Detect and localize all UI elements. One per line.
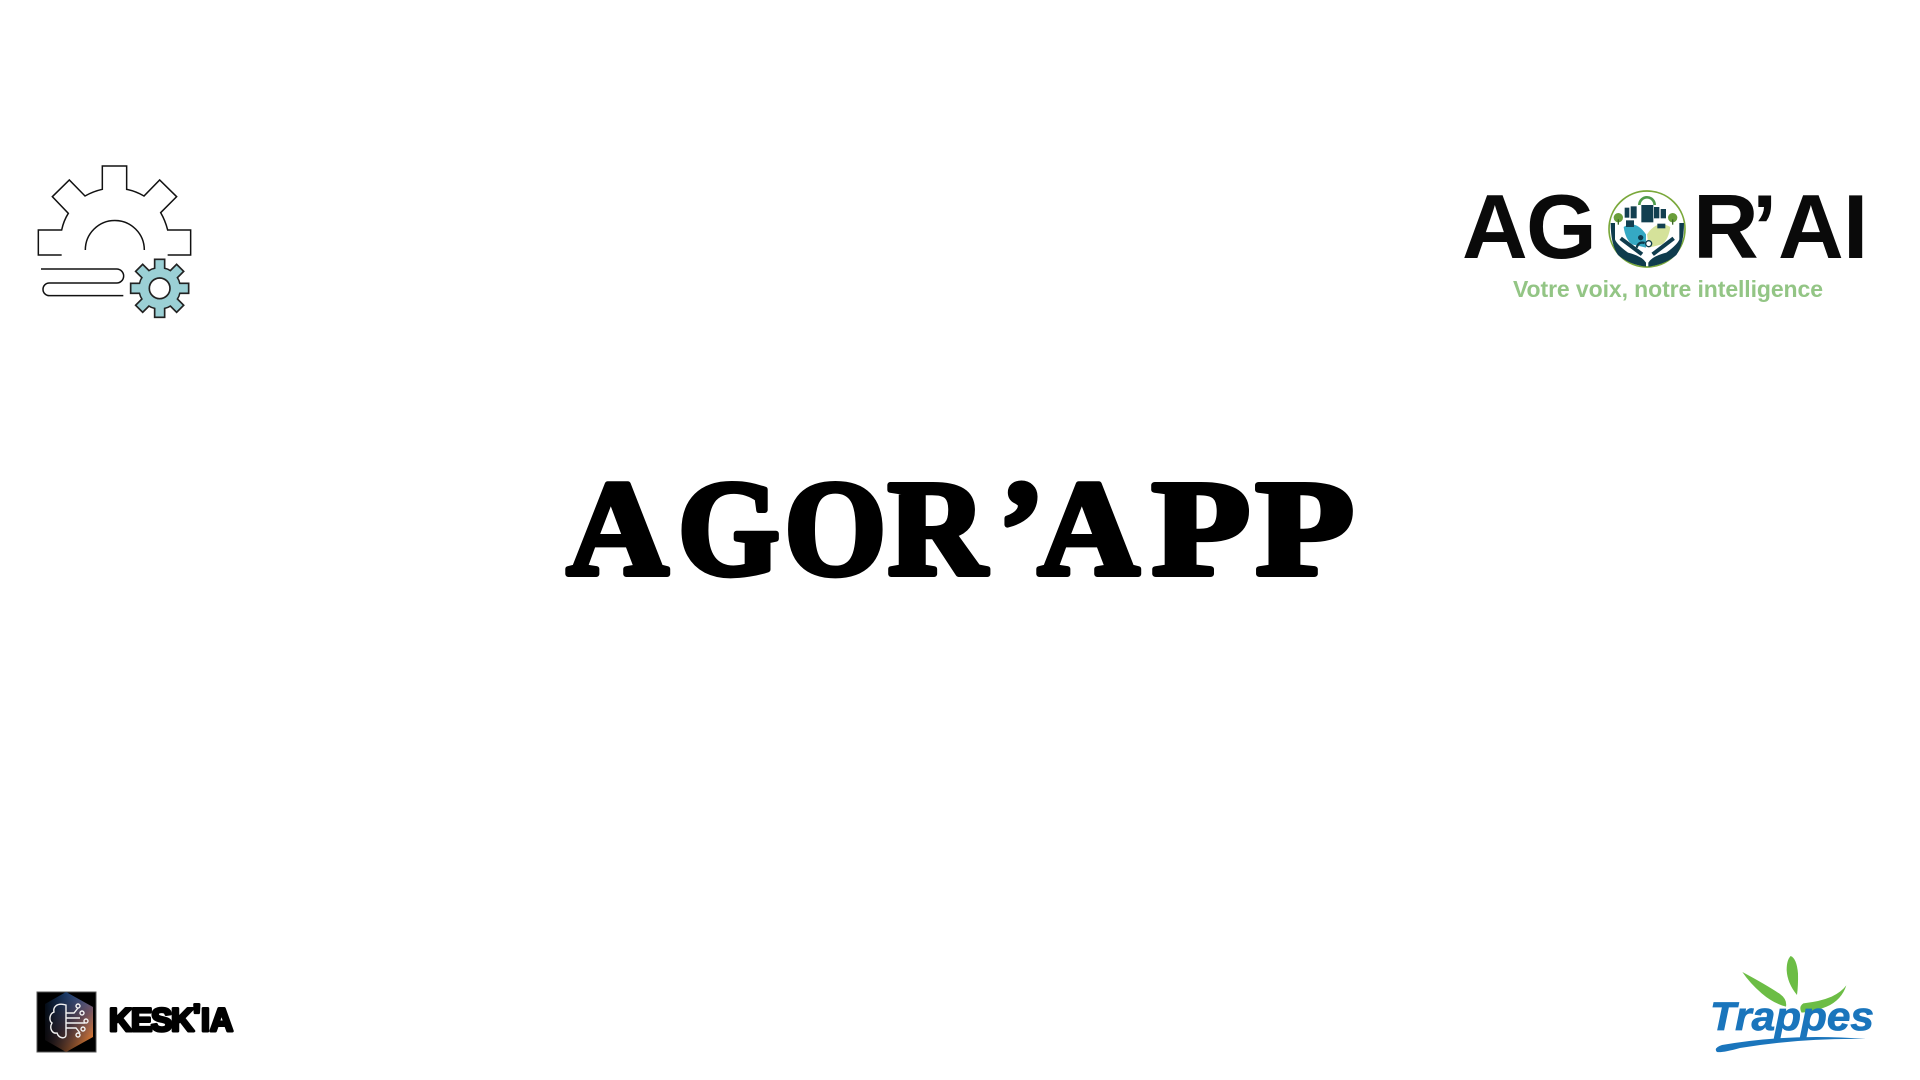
tagline: Votre voix, notre intelligence bbox=[1513, 276, 1823, 302]
wordmark: KESK'IA bbox=[109, 998, 233, 1038]
title bbox=[567, 453, 1354, 604]
emblem: city held in hands bbox=[1609, 191, 1685, 267]
icon: green leaves bbox=[1742, 956, 1846, 1013]
title: GO bbox=[678, 453, 886, 604]
icon: gears with wind lines bbox=[38, 166, 191, 317]
logo: Trappes bbox=[1710, 956, 1874, 1052]
wordmark letters: AG bbox=[1462, 177, 1597, 278]
wordmark: Trappes bbox=[1710, 995, 1874, 1039]
title: A bbox=[1038, 453, 1139, 604]
swoosh bbox=[1716, 1037, 1866, 1052]
icon: brain circuit on hexagon bbox=[37, 992, 96, 1052]
title: PP bbox=[1152, 453, 1354, 604]
title: A bbox=[567, 453, 668, 604]
wordmark letters bbox=[1462, 177, 1868, 278]
wordmark letters: R’AI bbox=[1693, 177, 1868, 278]
title: R’ bbox=[888, 454, 1044, 604]
logo: AGOR'AI bbox=[1462, 177, 1868, 302]
logo: KESK'IA bbox=[37, 992, 233, 1052]
